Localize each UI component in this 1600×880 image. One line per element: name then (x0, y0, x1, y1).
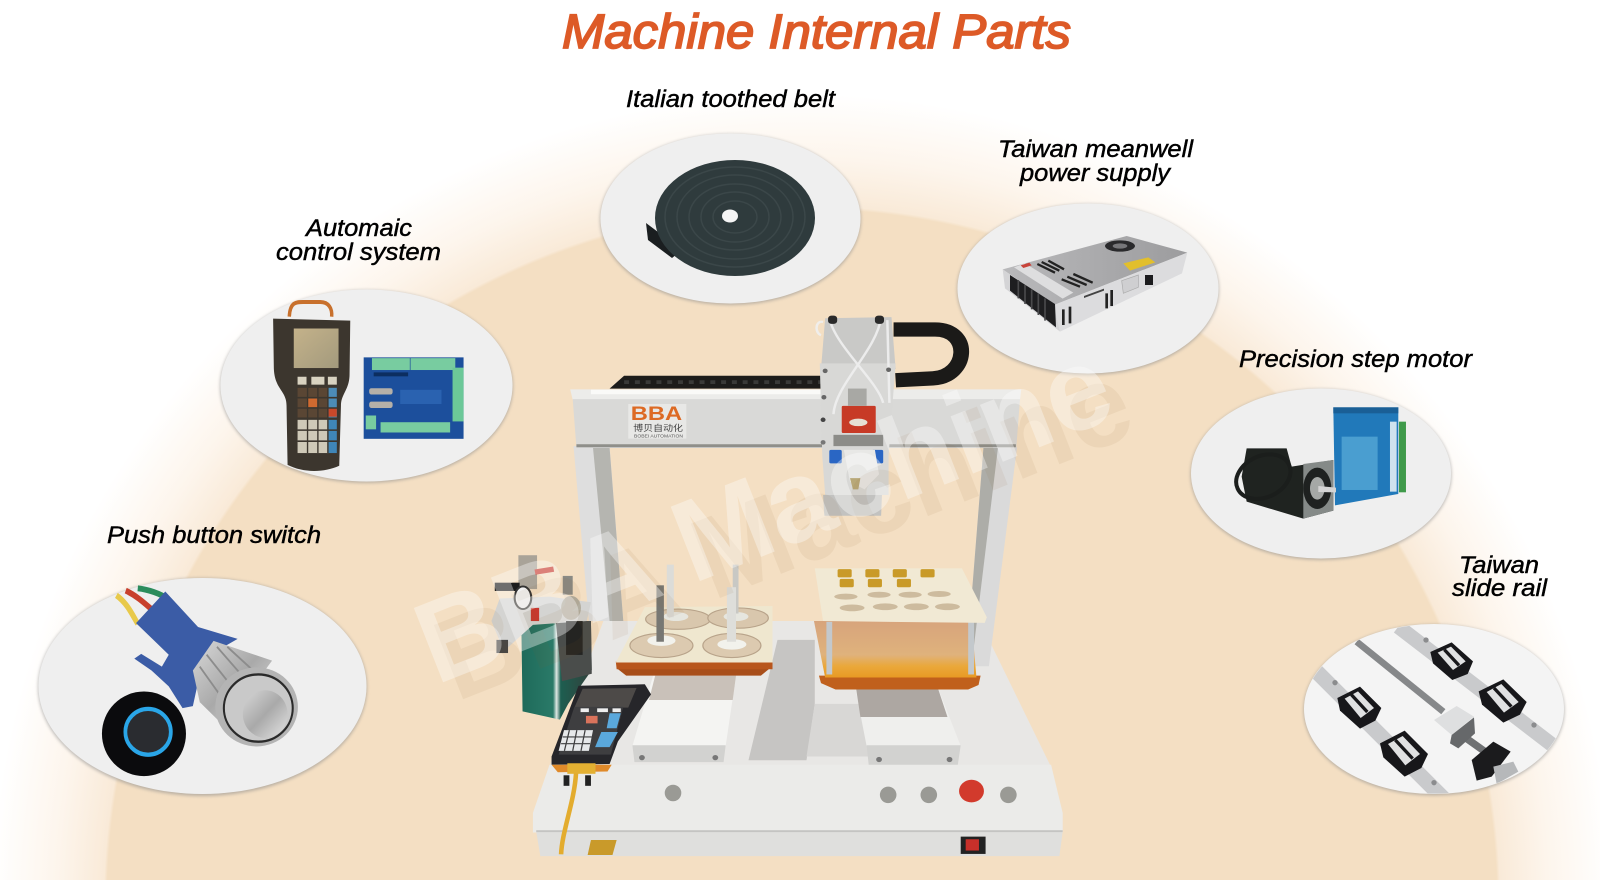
watermark: BBA Machine: BBA Machine (418, 335, 1149, 725)
label: Automaic control system (276, 215, 441, 266)
label: Precision step motor: Precision step motor (1239, 346, 1473, 373)
steel button head (215, 667, 298, 746)
bearing support block (1472, 742, 1511, 781)
fan (1105, 240, 1135, 252)
right slide table (855, 689, 961, 765)
slider block 4 (1479, 679, 1527, 723)
gantry left post (574, 446, 623, 621)
blue connector (134, 591, 238, 708)
handheld teach pendant (552, 684, 651, 786)
slider block 2 (1380, 731, 1428, 777)
motion control board (364, 357, 464, 439)
gantry right post (966, 447, 1017, 666)
dispensing head (817, 316, 896, 516)
end frame with heat fins (1003, 269, 1060, 332)
rocker switch (961, 837, 986, 854)
label: Taiwan meanwell power supply: power supply (1019, 160, 1172, 187)
panel: italian toothed belt (600, 134, 861, 305)
handheld controller (289, 302, 332, 317)
label: Taiwan meanwell power supply (998, 136, 1194, 187)
warning sticker (1123, 257, 1155, 271)
panel: meanwell power supply (957, 204, 1219, 375)
panel: precision step motor (1190, 388, 1452, 560)
belt roll (655, 160, 815, 276)
panel: push button switch (38, 578, 367, 796)
slider block 1 (1337, 687, 1381, 729)
panel buttons (665, 785, 1017, 803)
motor body (1242, 448, 1333, 519)
vents (1037, 261, 1093, 287)
label: Automaic control system: control system (276, 239, 441, 266)
cable chain on gantry (610, 376, 823, 389)
gantry beam (570, 389, 1021, 448)
logo plate (628, 403, 686, 439)
panel: automatic control system (220, 290, 513, 483)
socket and bracket (1145, 275, 1153, 285)
glue pressure tank (491, 555, 592, 720)
belt tail (646, 223, 682, 258)
ball screw (1357, 642, 1443, 712)
label: Taiwan slide rail: Taiwan (1459, 552, 1539, 579)
screw nut (1434, 706, 1474, 735)
yellow cable (561, 773, 576, 854)
logo plate: 博贝自动化 (633, 423, 683, 433)
servo driver (1333, 407, 1398, 505)
title: Machine Internal Parts (562, 6, 1071, 59)
watermark: BBA Machine: BBA Machine (398, 318, 1129, 708)
slider block 3 (1430, 642, 1473, 680)
machine base (533, 621, 1063, 856)
top cover (1003, 236, 1187, 305)
belt hole (722, 210, 738, 222)
logo plate: BOBEI AUTOMATION (634, 434, 683, 438)
label: Taiwan meanwell power supply: Taiwan meanwell (998, 136, 1194, 163)
machine: desktop dispensing robot (491, 316, 1063, 856)
label: Push button switch: Push button switch (107, 522, 321, 549)
label: Taiwan slide rail: slide rail (1452, 575, 1548, 602)
logo plate: BBA (631, 403, 682, 425)
wires (116, 595, 138, 624)
label strip (1014, 263, 1073, 299)
threaded body (193, 641, 272, 726)
label: Automaic control system: Automaic (304, 215, 412, 242)
black illuminated button (102, 691, 186, 776)
left slide table (632, 676, 736, 762)
linear rails (1313, 668, 1443, 798)
panel: taiwan slide rail (1304, 624, 1564, 798)
motor cable loop (1229, 446, 1298, 507)
left fixture with pins (616, 565, 773, 676)
power socket (588, 840, 617, 855)
emergency stop button (959, 780, 984, 802)
drag chain loop (894, 330, 961, 380)
right fixture with clear box (814, 568, 987, 690)
label: Italian toothed belt: Italian toothed belt (626, 86, 836, 113)
side face (1054, 253, 1187, 332)
label: Taiwan slide rail (1452, 552, 1548, 602)
